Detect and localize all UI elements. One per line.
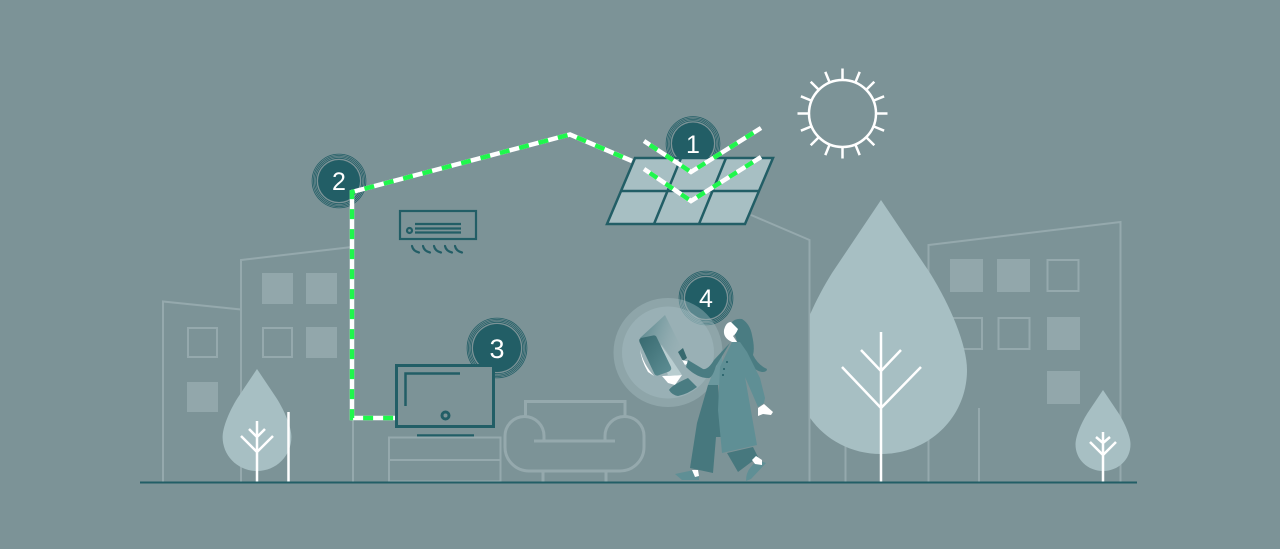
- window filled: [306, 273, 337, 304]
- house wall outline: [751, 215, 846, 482]
- sunlight ray upper: [644, 128, 761, 172]
- woman: [675, 319, 773, 481]
- glow circle: [614, 298, 722, 407]
- solar panel: [607, 158, 773, 224]
- front foot: [692, 470, 699, 477]
- window filled: [1047, 371, 1080, 404]
- sleeve: [669, 378, 697, 396]
- back trouser leg: [727, 447, 758, 472]
- face: [724, 322, 738, 342]
- hair: [731, 319, 767, 372]
- badge 1: 1: [686, 131, 700, 159]
- window outline: [998, 318, 1030, 349]
- arm: [686, 343, 730, 378]
- badge 3: 3: [489, 334, 505, 364]
- left building back: [163, 302, 241, 482]
- window outline: [263, 328, 292, 357]
- back shoe: [746, 460, 766, 481]
- television: [396, 366, 494, 436]
- window filled: [262, 273, 293, 304]
- left tree: [223, 369, 291, 482]
- badge 2: 2: [332, 168, 346, 196]
- window outline: [950, 318, 982, 349]
- phone: [678, 348, 687, 361]
- air conditioner: [400, 211, 476, 252]
- badge 1: [666, 117, 720, 170]
- energy dashed line: [352, 134, 632, 418]
- window outline: [188, 328, 217, 357]
- window outline: [1048, 260, 1078, 291]
- white post: [287, 412, 290, 482]
- ground line: [140, 482, 1137, 484]
- tablet: [639, 335, 671, 376]
- badge 4: 4: [699, 285, 713, 313]
- window filled: [187, 382, 218, 412]
- badge 3: [467, 318, 527, 378]
- big tree: [795, 200, 967, 482]
- sun: [798, 68, 888, 158]
- window filled: [306, 327, 337, 358]
- left building front: [241, 247, 353, 482]
- front trouser leg: [690, 385, 722, 473]
- badge 4: [679, 271, 733, 325]
- window filled: [997, 259, 1030, 292]
- cabinet: [389, 438, 500, 482]
- badge 2: [312, 154, 366, 208]
- window filled: [950, 259, 983, 292]
- coat buttons: [722, 361, 728, 376]
- coat: [718, 342, 765, 453]
- undershirt: [708, 350, 722, 385]
- back foot: [752, 456, 762, 465]
- window filled: [1047, 317, 1080, 350]
- sunlight ray lower: [644, 157, 761, 201]
- front shoe: [675, 470, 699, 480]
- hand: [758, 404, 773, 416]
- white glow behind device: [640, 349, 654, 376]
- sofa: [505, 402, 644, 482]
- right building: [928, 222, 1120, 482]
- device and light beam: [639, 315, 697, 396]
- right small tree: [1076, 390, 1130, 482]
